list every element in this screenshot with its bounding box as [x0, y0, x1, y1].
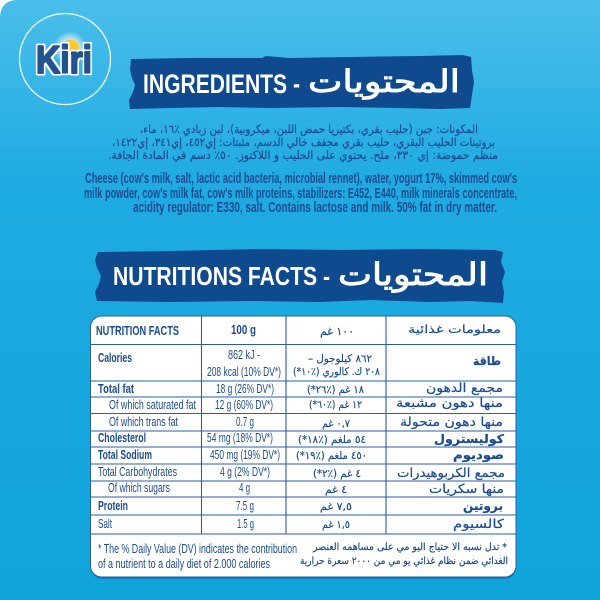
row: cholesterol: 54 mg (18% DV*)	[207, 431, 273, 445]
row: total carbohydrates: ٤ غم (٪٢*)	[313, 468, 361, 480]
row: sugars: Of which sugars	[108, 481, 170, 495]
row: total carbohydrates	[98, 465, 505, 481]
row: cholesterol: ٥٤ ملغم (٪١٨*)	[298, 434, 366, 446]
row: trans fat: منها دهون متحولة	[400, 414, 503, 430]
footnote: English: * The % Daily Value (DV) indicates the contribution	[98, 541, 297, 556]
row: sugars: 4 g	[239, 481, 250, 495]
row: calories: ٨٦٢ كيلوجول –	[308, 353, 372, 365]
row: salt: ١,٥ غم	[322, 519, 350, 531]
ingredients text: Arabic	[108, 122, 498, 163]
footnote: English	[98, 541, 297, 571]
row: cholesterol: كوليسترول	[434, 432, 504, 447]
table header row: NUTRITION FACTS	[96, 323, 179, 338]
row: protein: ٧,٥ غم	[320, 501, 352, 513]
ingredients text: English	[84, 171, 517, 216]
row: salt: Salt	[98, 517, 112, 531]
row: cholesterol	[98, 431, 504, 447]
row: total sodium: Total Sodium	[98, 448, 152, 462]
heading banner: ingredients	[129, 55, 474, 109]
row: salt	[98, 516, 504, 532]
row: trans fat: Of which trans fat	[109, 415, 178, 429]
row: trans fat: ٠,٧ غم	[322, 418, 350, 430]
row: cholesterol: Cholesterol	[98, 431, 146, 445]
row: calories: ٢٠٨ ك. كالوري (٪١٠*)	[293, 366, 380, 378]
row: total fat	[98, 380, 503, 396]
row: protein: 7.5 g	[236, 499, 254, 513]
heading banner: ingredients: المحتويات	[308, 64, 460, 100]
row: total fat: Total fat	[98, 382, 135, 396]
row: protein: بروتين	[463, 499, 503, 514]
table header row: معلومات غذائية	[408, 323, 501, 336]
ingredients text: Arabic: منظم حموضة: إي ٣٣٠، ملح. يحتوي على الحليب و اللاكتوز. ٥٠٪ دسم في المادة الجافة.	[108, 148, 498, 163]
footnote: Arabic: * تدل نسبه الا حتياج اليو مي على مساهمه العنصر	[312, 542, 507, 553]
ingredients text: Arabic: بروتينات الحليب البقري، حليب بقري مجفف خالي الدسم، مثبتات: إي٤٥٢، إي٣٤١، إي١٤٢٢،	[112, 135, 495, 150]
heading banner: nutrition facts	[95, 249, 505, 303]
heading banner: ingredients: INGREDIENTS -	[143, 69, 300, 99]
row: total fat: 18 g (26% DV*)	[216, 382, 274, 396]
row: calories: 862 kJ -	[228, 348, 260, 362]
row: saturated fat: 12 g (60% DV*)	[215, 398, 273, 412]
nutrition table	[90, 316, 516, 579]
logo: Kiri badge: Kiri	[36, 39, 92, 82]
row: salt: 1.5 g	[237, 517, 254, 531]
row: calories	[98, 348, 501, 379]
table header row: 100 g	[231, 322, 256, 337]
row: saturated fat: ١٢ غم (٪٦٠*)	[309, 399, 362, 411]
footnote: Arabic: الغدائي ضمن نظام غذائي يو مي من ٢٠٠٠ سعرة حرارية	[300, 556, 508, 567]
row: total sodium: صوديوم	[453, 448, 504, 463]
row: total carbohydrates: Total Carbohydrates	[98, 465, 177, 479]
row: saturated fat: منها دهون مشبعة	[396, 395, 503, 411]
row: total sodium	[98, 448, 504, 463]
row: total sodium: 450 mg (19% DV*)	[210, 448, 280, 462]
logo: Kiri badge	[20, 14, 110, 104]
row: trans fat: 0.7 g	[236, 415, 254, 429]
row: total fat: ١٨ غم (٪٢٦*)	[307, 384, 364, 396]
row: sugars: منها سكريات	[429, 481, 504, 497]
table header row: ١٠٠ غم	[320, 325, 354, 338]
row: saturated fat	[109, 395, 503, 412]
table header row	[96, 322, 501, 338]
ingredients text: Arabic: المكونات: جبن (حليب بقري، بكتيريا حمض اللبن، ميكروبية)، لبن زبادي ٪١٦، ماء،	[140, 122, 478, 137]
row: trans fat	[109, 414, 503, 430]
row: calories: Calories	[98, 351, 132, 365]
row: saturated fat: Of which saturated fat	[109, 398, 196, 412]
row: total carbohydrates: 4 g (2% DV*)	[220, 465, 270, 479]
heading banner: nutrition facts: NUTRITIONS FACTS -	[113, 261, 330, 291]
row: total fat: مجمع الدهون	[426, 380, 503, 396]
row: total carbohydrates: مجمع الكربوهيدرات	[397, 465, 505, 481]
row: protein: Protein	[98, 499, 128, 513]
heading banner: nutrition facts: المحتويات	[338, 257, 488, 293]
row: calories: طاقة	[473, 354, 501, 368]
row: sugars: ٤ غم	[325, 484, 347, 496]
footnote: Arabic	[300, 542, 508, 567]
row: total sodium: ٤٥٠ ملغم (٪١٩*)	[296, 450, 367, 462]
row: sugars	[108, 481, 504, 497]
row: calories: 208 kcal (10% DV*)	[207, 365, 281, 379]
row: salt: كالسيوم	[453, 516, 504, 532]
footnote: English: of a nutrient to a daily diet of 2.000 calories	[98, 556, 270, 571]
row: protein	[98, 499, 503, 514]
